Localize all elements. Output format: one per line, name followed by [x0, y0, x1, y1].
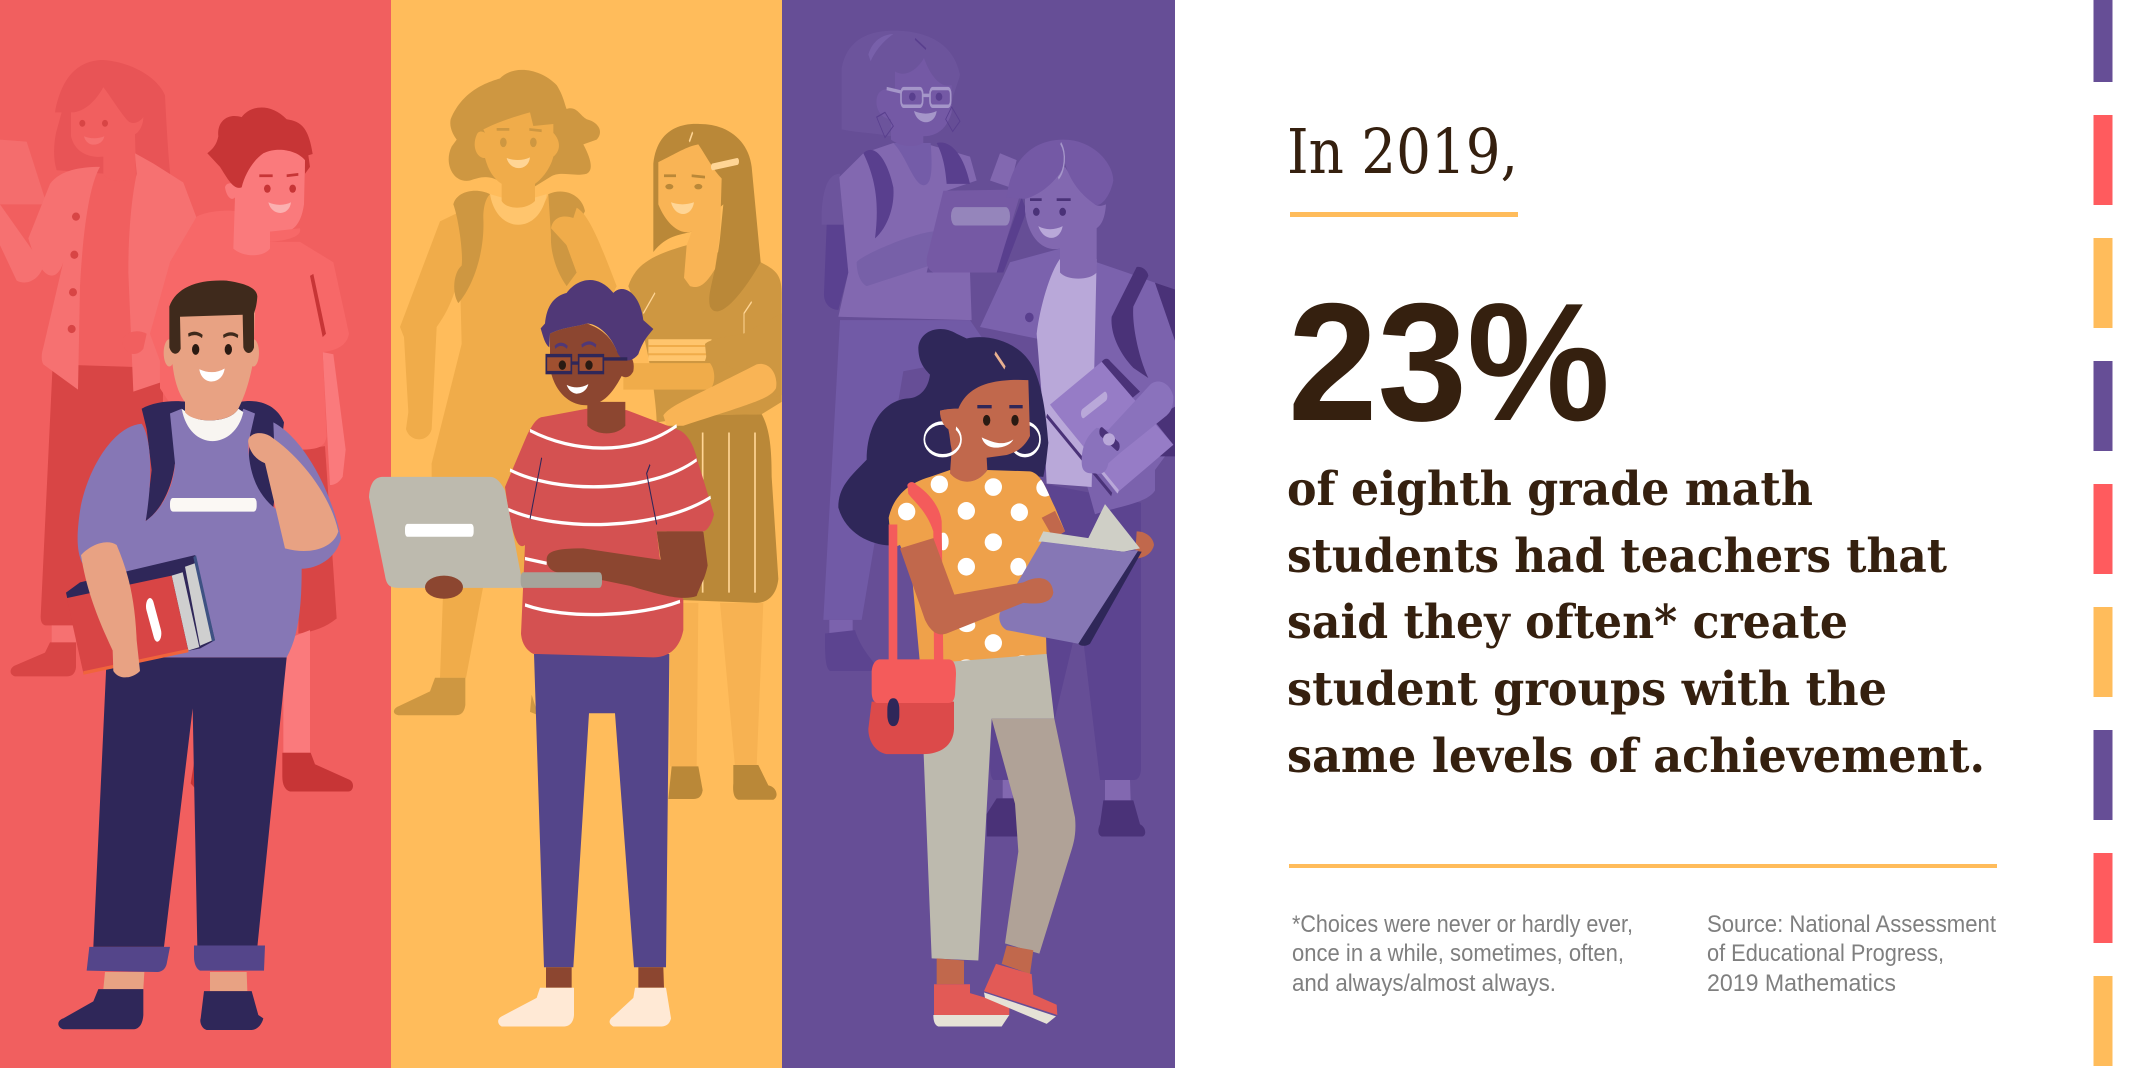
icon: laptop	[369, 477, 602, 599]
heading: In 2019,: In 2019,	[1287, 115, 1518, 188]
footnote	[1292, 911, 1633, 997]
body text: said they often* create	[1287, 595, 1848, 650]
main figure: student with glasses and laptop	[369, 280, 714, 1027]
panel: yellow column	[369, 0, 782, 1068]
body text: students had teachers that	[1287, 529, 1947, 584]
background figure: woman with tablet	[0, 60, 197, 676]
body text: student groups with the	[1287, 662, 1887, 717]
main figure: boy with backpack and books	[58, 280, 341, 1030]
icon: shoulder bag	[868, 659, 956, 754]
panel: purple column	[782, 0, 1175, 1068]
background figure: curly haired girl with backpack	[394, 70, 617, 715]
polka dots	[898, 475, 1054, 673]
footnote: *Choices were never or hardly ever,	[1292, 911, 1633, 938]
yellow rule under heading	[1290, 212, 1518, 217]
background figure: curly haired student	[122, 107, 353, 792]
yellow rule above notes	[1289, 864, 1997, 868]
main figure: woman with shoulder bag and open book	[838, 329, 1154, 1027]
source note	[1707, 911, 1996, 997]
body text: of eighth grade math	[1287, 462, 1813, 517]
source note: 2019 Mathematics	[1707, 970, 1896, 997]
source note: of Educational Progress,	[1707, 940, 1944, 967]
background figure: woman with glasses and tablet	[822, 31, 1027, 671]
icon: folder	[1047, 359, 1173, 495]
body text	[1287, 462, 1985, 784]
icon: open book	[999, 504, 1142, 646]
panel: red column	[0, 0, 391, 1068]
body text: same levels of achievement.	[1287, 729, 1985, 784]
big number: 23%: 23%	[1288, 268, 1610, 456]
footnote: once in a while, sometimes, often,	[1292, 940, 1624, 967]
background figure: man with folder and backpack	[980, 140, 1175, 836]
source note: Source: National Assessment	[1707, 911, 1996, 938]
footnote: and always/almost always.	[1292, 970, 1556, 997]
background figure: long haired girl with books	[623, 124, 782, 800]
right edge colour bars	[2094, 0, 2112, 1066]
